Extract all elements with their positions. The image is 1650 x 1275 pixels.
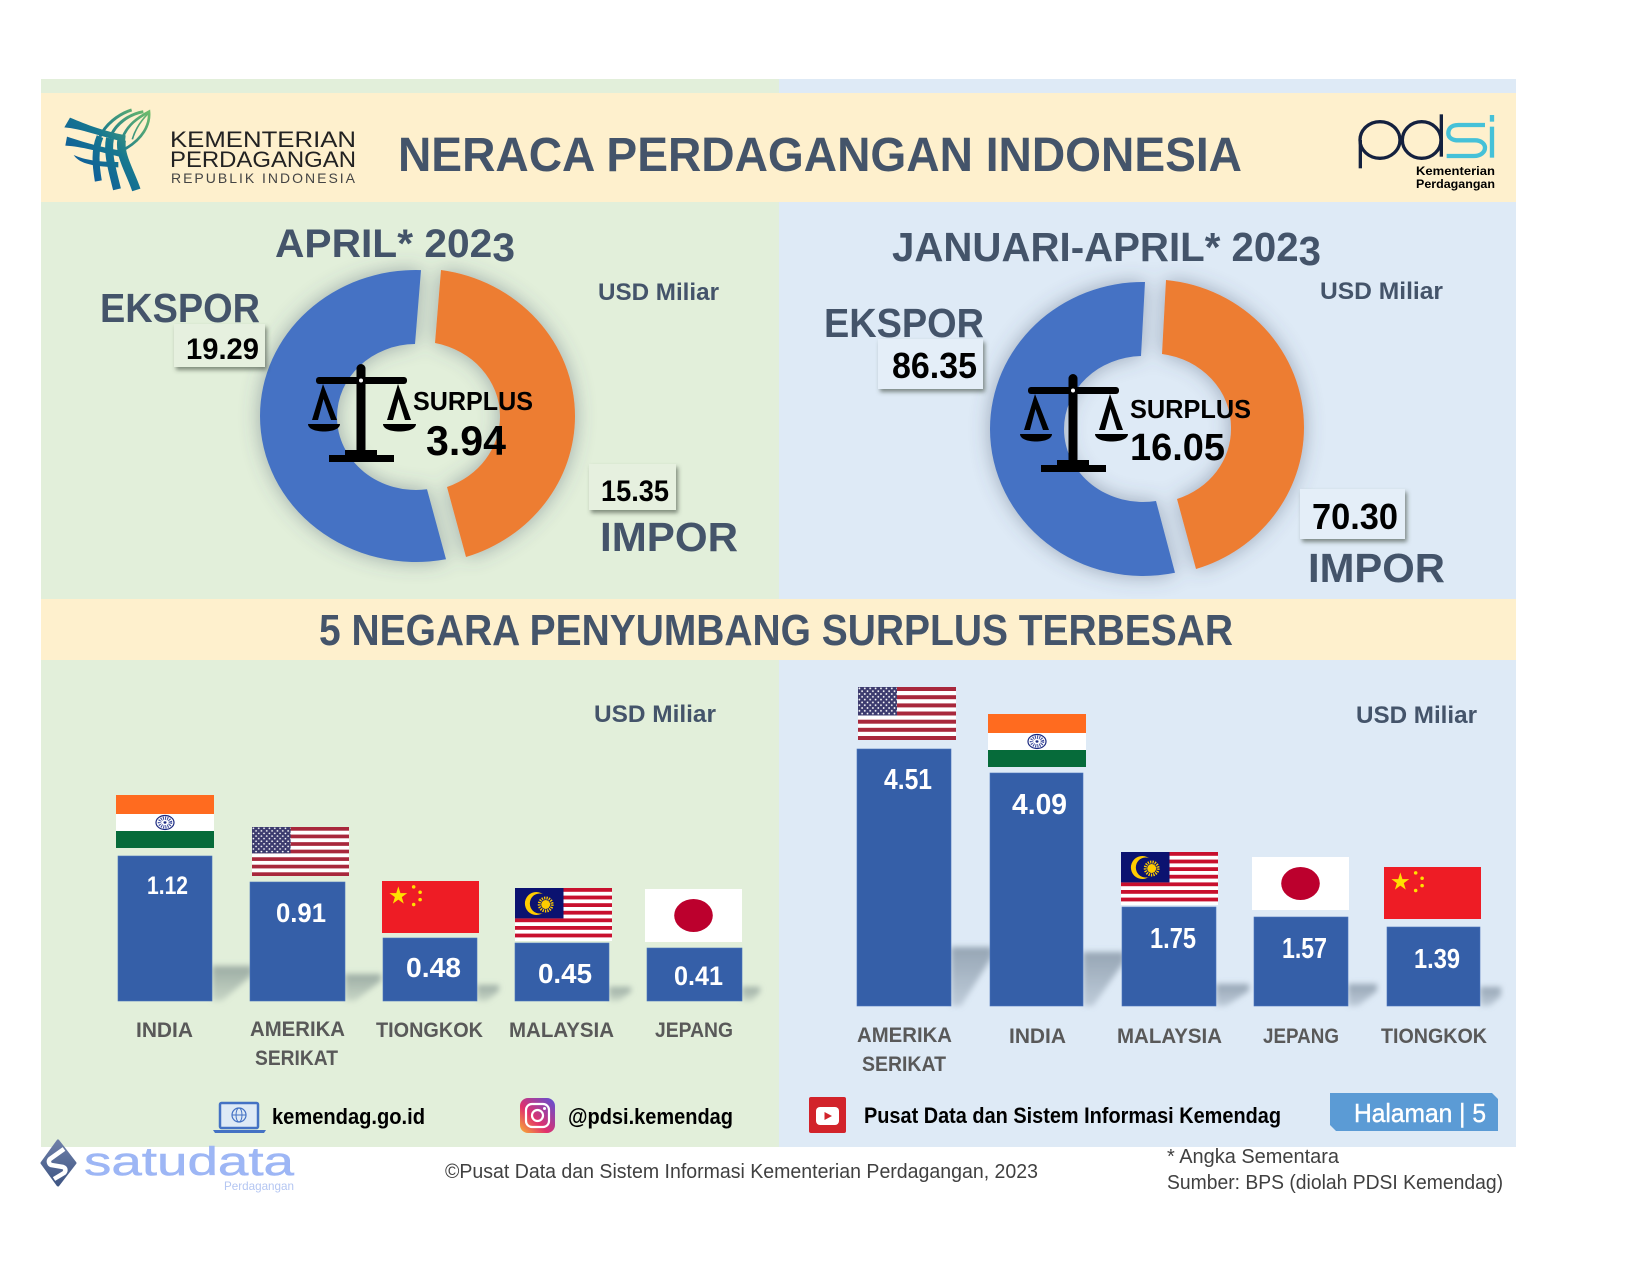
bar: Amerika Serikat: SERIKAT xyxy=(255,1047,338,1070)
instagram handle: @pdsi.kemendag xyxy=(568,1104,733,1129)
callout: ekspor value xyxy=(174,324,265,367)
bar: Amerika Serikat xyxy=(857,687,956,1076)
bar: Malaysia: 0.45 xyxy=(538,958,592,989)
label: ekspor: EKSPOR xyxy=(824,300,984,346)
youtube channel: Pusat Data dan Sistem Informasi Kemendag xyxy=(864,1103,1281,1128)
bar: India: 4.09 xyxy=(1012,789,1067,821)
bar: Jepang: 0.41 xyxy=(674,961,723,991)
bar: Tiongkok xyxy=(376,881,483,1042)
label: ekspor: EKSPOR xyxy=(100,285,260,331)
heading: April 2023: APRIL* 2023 xyxy=(275,222,515,270)
website: kemendag.go.id xyxy=(272,1104,425,1129)
bar: Jepang: JEPANG xyxy=(655,1019,733,1042)
bar: Malaysia xyxy=(509,888,614,1042)
bar: Amerika Serikat: 4.51 xyxy=(884,764,932,796)
bar: Amerika Serikat: SERIKAT xyxy=(862,1053,946,1076)
bar: Jepang: JEPANG xyxy=(1263,1025,1339,1048)
logo text: ministry name: KEMENTERIAN xyxy=(170,127,356,152)
bar: Tiongkok xyxy=(1381,867,1487,1048)
bar: Amerika Serikat: AMERIKA xyxy=(857,1024,952,1047)
surplus value: SURPLUS xyxy=(1130,394,1251,424)
logo: satudata xyxy=(42,1140,295,1193)
bar: Jepang xyxy=(1252,857,1349,1048)
callout: impor value: 15.35 xyxy=(601,475,669,508)
unit label: USD Miliar xyxy=(1320,278,1443,305)
heading: Januari-April 2023: JANUARI-APRIL* 2023 xyxy=(892,224,1321,274)
donut chart: April xyxy=(260,270,575,562)
bar: Amerika Serikat: 0.91 xyxy=(276,898,326,928)
bar: Jepang xyxy=(645,889,742,1042)
icon: balance scale xyxy=(308,364,416,462)
bar shadows xyxy=(951,947,1501,1006)
background panels xyxy=(41,79,1516,1147)
bar: Tiongkok: TIONGKOK xyxy=(1381,1025,1487,1048)
page badge: Halaman | 5 xyxy=(1354,1098,1486,1128)
bar: Tiongkok: 0.48 xyxy=(406,952,461,983)
bar: India: 1.12 xyxy=(147,872,188,900)
bar: Amerika Serikat: AMERIKA xyxy=(250,1018,345,1041)
logo text: ministry name: REPUBLIK INDONESIA xyxy=(171,170,356,186)
callout: ekspor value: 19.29 xyxy=(186,333,259,366)
bar: Tiongkok: TIONGKOK xyxy=(376,1019,483,1042)
callout: ekspor value: 86.35 xyxy=(892,345,977,386)
panel: April 2023 xyxy=(100,222,738,562)
logo: Kementerian Perdagangan emblem xyxy=(64,110,149,190)
surplus value xyxy=(413,386,533,464)
logo: pdsi: Kementerian xyxy=(1416,164,1495,178)
callout: impor value: 70.30 xyxy=(1312,496,1398,537)
surplus value: 16.05 xyxy=(1130,427,1225,469)
bar: Malaysia: MALAYSIA xyxy=(1117,1025,1222,1048)
unit label: USD Miliar xyxy=(1356,702,1477,729)
unit label: USD Miliar xyxy=(598,279,719,306)
surplus value xyxy=(1130,394,1251,469)
bar: India: INDIA xyxy=(1009,1025,1066,1048)
footnote: Sumber: BPS (diolah PDSI Kemendag) xyxy=(1167,1172,1503,1194)
icon: laptop xyxy=(213,1103,266,1133)
label: impor: IMPOR xyxy=(1308,545,1445,591)
surplus value: SURPLUS xyxy=(413,386,533,416)
logo: pdsi: Perdagangan xyxy=(1416,177,1495,191)
callout: impor value xyxy=(589,464,676,510)
footnote: * Angka Sementara xyxy=(1167,1146,1340,1168)
unit label: USD Miliar xyxy=(594,701,716,728)
panel: right bar chart Januari-April xyxy=(857,687,1501,1076)
bar: Malaysia: MALAYSIA xyxy=(509,1019,614,1042)
donut chart: Januari-April xyxy=(990,280,1304,576)
copyright: ©Pusat Data dan Sistem Informasi Kementerian Perdagangan, 2023 xyxy=(445,1161,1038,1183)
icon: balance scale xyxy=(1020,374,1128,472)
header band xyxy=(41,93,1516,202)
logo: pdsi xyxy=(1360,114,1495,191)
page badge xyxy=(1330,1093,1498,1131)
footnote xyxy=(1167,1146,1503,1194)
logo: satudata: Perdagangan xyxy=(224,1179,294,1193)
bar: India: INDIA xyxy=(136,1019,193,1042)
surplus value: 3.94 xyxy=(426,417,507,464)
logo: satudata: satudata xyxy=(84,1140,295,1184)
panel: Januari-April 2023 xyxy=(824,224,1445,591)
icon: instagram xyxy=(520,1098,555,1133)
section heading band: 5 NEGARA PENYUMBANG SURPLUS TERBESAR xyxy=(319,606,1233,655)
panel: left bar chart April xyxy=(116,701,760,1070)
bar: Malaysia: 1.75 xyxy=(1150,923,1196,955)
section heading band xyxy=(41,599,1516,660)
bar: Jepang: 1.57 xyxy=(1282,933,1327,965)
bar: Amerika Serikat xyxy=(250,827,349,1070)
bar shadows xyxy=(212,966,760,1001)
logo text: ministry name: PERDAGANGAN xyxy=(170,147,356,172)
footer links xyxy=(213,1093,1498,1133)
label: impor: IMPOR xyxy=(600,514,738,560)
logo text: ministry name xyxy=(170,127,356,186)
bar: India xyxy=(988,714,1086,1048)
bar: India xyxy=(116,795,214,1042)
icon: youtube xyxy=(809,1097,846,1133)
title: NERACA PERDAGANGAN INDONESIA xyxy=(398,129,1242,182)
bar: Malaysia xyxy=(1117,852,1222,1048)
bar: Tiongkok: 1.39 xyxy=(1414,943,1460,974)
